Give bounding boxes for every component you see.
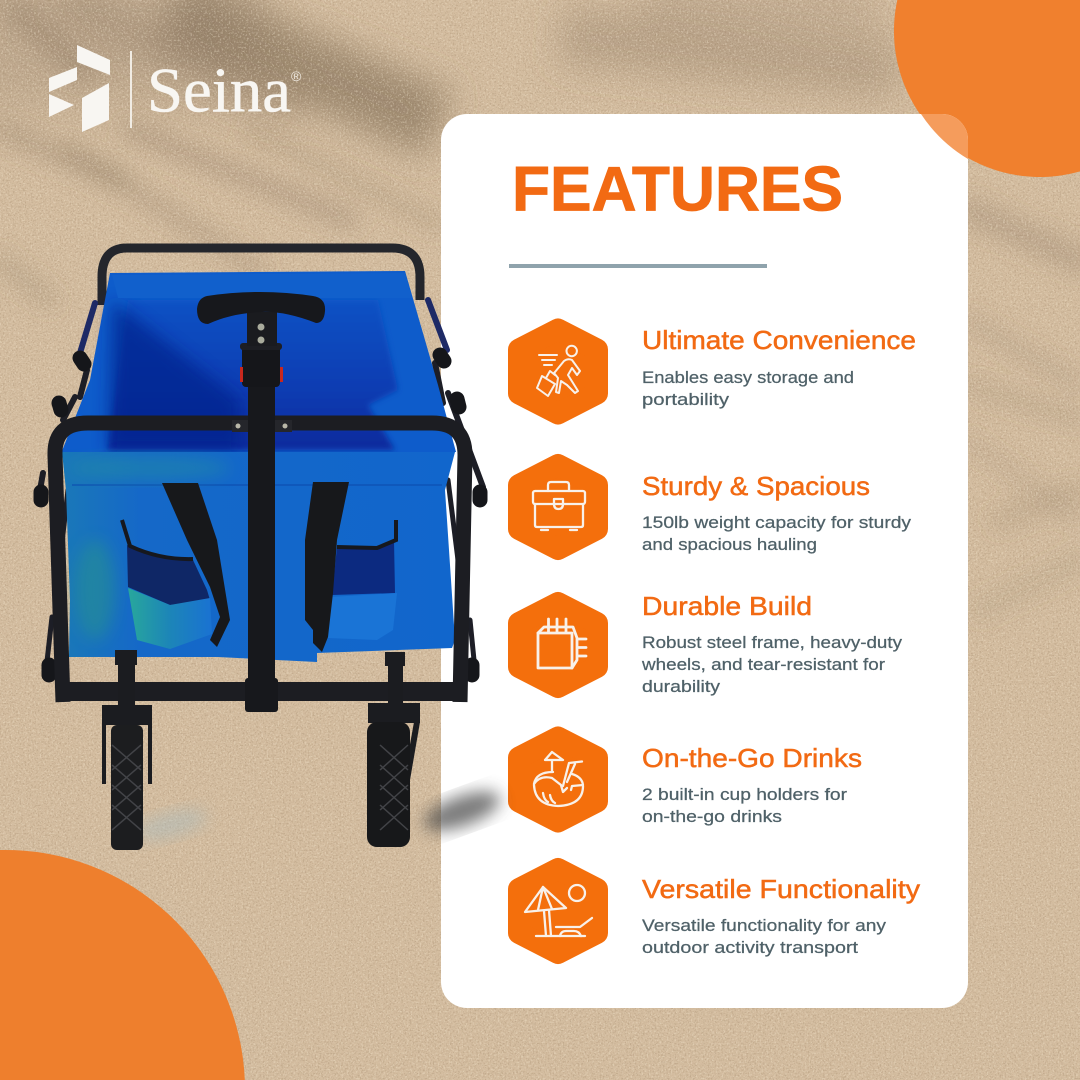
feature: durable build	[519, 591, 903, 696]
decorative orange circle top right	[894, 0, 1080, 177]
logo: Seina	[49, 45, 302, 132]
description: outdoor activity transport	[642, 938, 858, 957]
feature: ultimate convenience	[519, 325, 916, 414]
logo: Seina: ®	[291, 68, 302, 84]
wagon front fabric	[62, 452, 455, 662]
description	[642, 916, 887, 957]
description: portability	[642, 390, 730, 409]
right mesh pocket	[328, 520, 397, 640]
left strap	[162, 483, 230, 647]
description: Robust steel frame, heavy-duty	[642, 633, 903, 652]
logo wordmark: Seina	[147, 54, 291, 126]
title: Durable Build	[642, 591, 812, 621]
description: wheels, and tear-resistant for	[641, 655, 885, 674]
T handle	[197, 292, 325, 346]
right leg bracket	[368, 652, 420, 780]
description: on-the-go drinks	[642, 807, 782, 826]
description: 2 built-in cup holders for	[642, 785, 847, 804]
icon: beach umbrella and lounger	[519, 869, 597, 953]
icon: toolbox	[519, 465, 597, 549]
description: Enables easy storage and	[642, 368, 854, 387]
feature: on-the-go drinks	[519, 738, 862, 826]
frame hinge plates	[232, 420, 292, 432]
decorative circle overlap on card corner	[921, 114, 968, 159]
wagon interior shadow	[108, 300, 398, 450]
description: 150lb weight capacity for sturdy	[642, 513, 912, 532]
logo mark	[49, 45, 110, 132]
left leg bracket	[102, 650, 152, 784]
description	[642, 368, 854, 409]
icon: coconut drink	[519, 738, 597, 822]
description: Versatile functionality for any	[642, 916, 887, 935]
title: On-the-Go Drinks	[642, 743, 862, 773]
center pull stem	[248, 385, 275, 681]
feature: versatile functionality	[519, 869, 920, 957]
title: Sturdy & Spacious	[642, 471, 870, 501]
heading divider	[509, 264, 767, 268]
icon: person walking with luggage	[519, 330, 597, 414]
left mesh pocket	[122, 520, 212, 649]
right strap	[305, 482, 349, 652]
description	[641, 633, 903, 696]
wagon interior liner	[60, 271, 456, 456]
description	[642, 513, 912, 554]
rear frame handle	[102, 248, 420, 305]
handle collar	[240, 343, 283, 387]
feature: sturdy and spacious	[519, 465, 912, 554]
front frame	[55, 423, 465, 702]
bottom crossbar	[62, 682, 460, 701]
shadow: wheel shadow on the ground	[130, 783, 505, 846]
side frame struts	[40, 300, 483, 675]
product: blue folding wagon	[40, 248, 483, 850]
description: durability	[642, 677, 721, 696]
right wheel	[367, 722, 410, 847]
heading: features: FEATURES	[512, 154, 843, 224]
decorative orange circle bottom left	[0, 850, 245, 1080]
panel: features card	[441, 114, 968, 1008]
icon: layered material	[519, 603, 597, 687]
title: Ultimate Convenience	[642, 325, 916, 355]
left wheel	[111, 725, 143, 850]
title: Versatile Functionality	[642, 874, 920, 904]
description	[642, 785, 847, 826]
description: and spacious hauling	[642, 535, 817, 554]
